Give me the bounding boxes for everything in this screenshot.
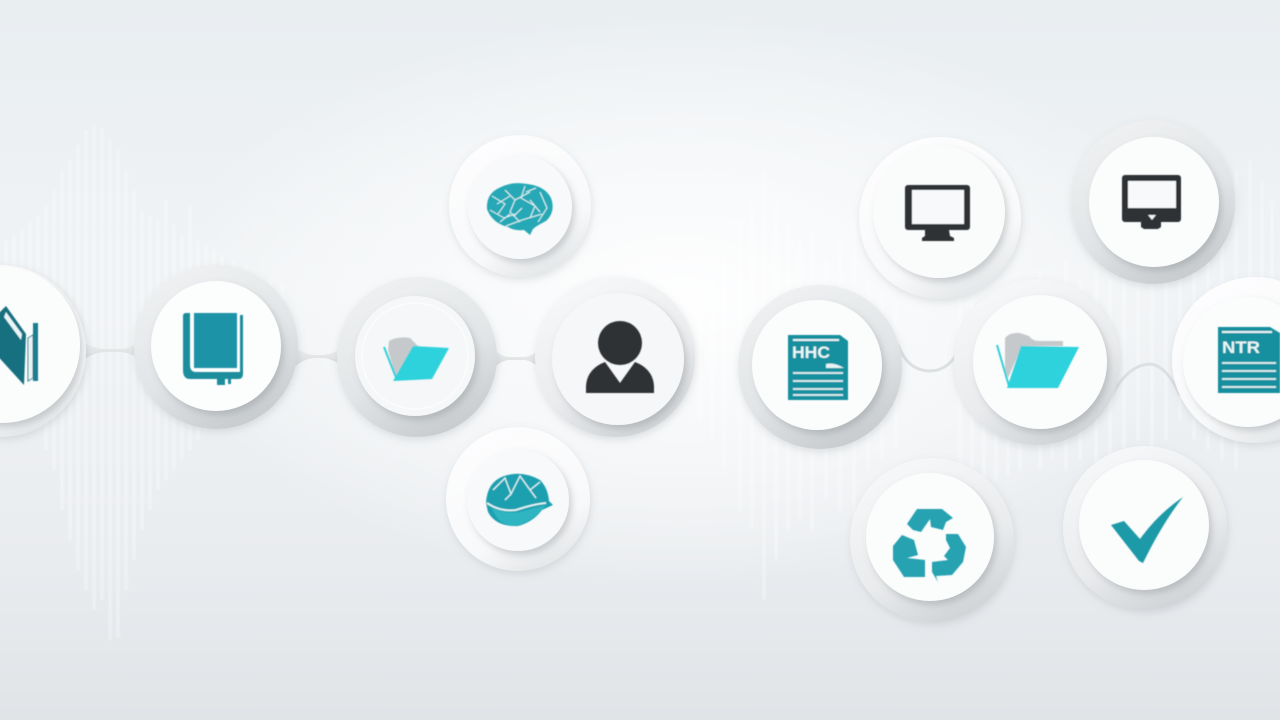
icon: closed book [183, 313, 243, 385]
node: check mark [1063, 446, 1227, 610]
icon: document [788, 335, 848, 400]
node: brain [449, 135, 591, 277]
node: left book [0, 265, 86, 437]
icon: check mark [1111, 497, 1183, 563]
right waveform pattern [700, 160, 1272, 600]
connector: folder to person [488, 344, 546, 374]
icon: document: HHC [792, 343, 830, 362]
node: globe cap [446, 427, 590, 571]
connector: book to folder [288, 342, 350, 372]
connector: folder to right document [1112, 364, 1180, 395]
node: recycle [850, 458, 1014, 622]
icon: document: NTR [1222, 338, 1260, 357]
node: monitor with stand [1071, 120, 1235, 284]
icon: document [1218, 327, 1280, 393]
node: large folder [954, 279, 1120, 445]
icon: recycle arrows [893, 509, 966, 582]
icon: open book [0, 306, 38, 385]
node: right document [1172, 277, 1280, 443]
node: person [535, 277, 695, 437]
node: folder small [337, 277, 497, 437]
icon: folder [384, 337, 449, 381]
icon: globe cap [486, 474, 553, 526]
icon: person [586, 321, 654, 393]
connector: document to folder [898, 345, 962, 371]
icon: monitor [1122, 175, 1181, 229]
left waveform pattern [6, 126, 282, 640]
node: document [738, 285, 902, 449]
node: book [134, 265, 298, 429]
icon: folder [997, 333, 1079, 388]
node: monitor [859, 137, 1021, 299]
icon: brain [487, 183, 553, 235]
icon: monitor [905, 185, 970, 241]
connector: left book to book [74, 336, 146, 366]
